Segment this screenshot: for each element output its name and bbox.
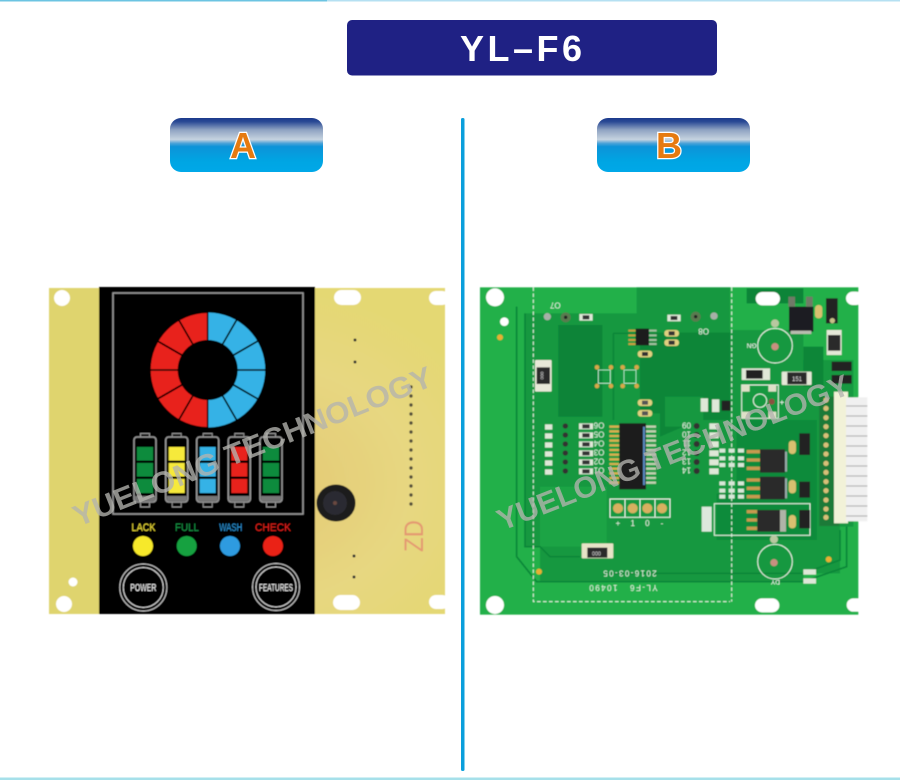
indicator: LACK: LACK	[132, 522, 156, 534]
resistor 151: 151	[792, 377, 803, 383]
resistor R22: 000	[592, 551, 601, 557]
indicator: CHECK	[255, 522, 292, 556]
panel B: green circuit board	[480, 287, 867, 615]
resistor array and pads left: O5	[593, 430, 604, 439]
small parts middle: +	[779, 397, 784, 407]
bottom border line	[0, 778, 900, 780]
trim pad outlines GN and DY: GN	[746, 341, 757, 348]
resistor R23	[535, 360, 552, 392]
display frame	[113, 293, 303, 514]
indicator: LACK	[132, 522, 156, 556]
small parts middle	[701, 368, 784, 497]
contact pads O7 O8	[544, 301, 718, 336]
board date and model silkscreen: YL-F6 10490	[589, 583, 658, 592]
indicator: FULL: FULL	[175, 522, 199, 534]
indicator: FULL	[175, 522, 199, 556]
FEATURES button: FEATURES	[259, 583, 293, 594]
watermark on panel A: YUELONG TECHNOLOGY	[68, 361, 437, 534]
gold circuit board	[49, 288, 449, 614]
indicator: CHECK: CHECK	[255, 522, 292, 534]
small SMD components top	[579, 314, 681, 417]
resistor R22	[582, 543, 613, 558]
diodes and capacitors right	[789, 433, 810, 528]
POWER button	[120, 564, 167, 611]
pads and labels right of IC: 09	[682, 421, 691, 430]
transistors Q	[747, 449, 787, 532]
main IC U1	[609, 423, 656, 489]
four pin header pads: 1	[630, 519, 635, 528]
battery 2 yellow	[166, 434, 188, 507]
resistor R17	[827, 330, 842, 355]
resistor array and pads left	[545, 421, 604, 475]
board date and model silkscreen: 2016-03-05	[603, 569, 657, 578]
FEATURES button	[252, 564, 300, 610]
small diodes near connector	[803, 362, 852, 584]
mounting holes	[486, 288, 863, 614]
indicator: WASH: WASH	[219, 522, 242, 534]
four pin header pads: +	[616, 519, 621, 528]
buzzer	[316, 484, 356, 522]
battery 1 green	[134, 434, 156, 507]
pads and labels right of IC: 11	[682, 439, 691, 448]
ring gauge: red and blue segments	[148, 310, 268, 430]
title banner: YL–F6	[460, 28, 582, 69]
top regulator U3 and capacitors	[788, 297, 838, 334]
label button A: A	[230, 125, 256, 166]
resistor array and pads left: O6	[593, 421, 604, 430]
battery icons row	[134, 434, 282, 507]
battery 3 blue	[197, 434, 219, 507]
resistor array and pads left: O2	[593, 457, 604, 466]
dashed outline	[533, 287, 732, 602]
indicator: WASH	[219, 522, 242, 556]
resistor array and pads left: O1	[593, 466, 604, 475]
battery 4 red	[228, 434, 250, 507]
label button B	[597, 118, 750, 172]
four pin header pads: -	[661, 519, 664, 528]
outlined zone around bottom transistor	[714, 504, 810, 535]
label button A	[170, 118, 323, 172]
label button B: B	[656, 125, 682, 166]
title banner	[347, 20, 717, 76]
push switches S1 S2	[595, 365, 639, 388]
IC U2	[628, 329, 657, 345]
black display panel	[99, 287, 315, 614]
pin header row	[409, 385, 413, 506]
pads and labels right of IC	[682, 421, 719, 475]
vertical divider	[461, 118, 464, 771]
panel A: control panel board	[49, 287, 449, 614]
pads and labels right of IC: 14	[682, 466, 691, 475]
resistor 151	[782, 372, 812, 385]
test pads	[497, 334, 832, 575]
board base	[480, 287, 858, 615]
resistor array and pads left: O4	[593, 439, 604, 448]
pads and labels right of IC: 12	[682, 448, 691, 457]
silkscreen ZD: ZD	[399, 520, 429, 552]
contact pads O7 O8: O7	[549, 301, 561, 310]
pads and labels right of IC: 10	[682, 430, 691, 439]
battery 5 green	[260, 434, 282, 507]
pads and labels right of IC: 13	[682, 457, 691, 466]
top border line	[0, 0, 900, 2]
four pin header pads: 0	[645, 519, 650, 528]
contact pads O7 O8: O8	[698, 327, 709, 336]
four pin header pads	[610, 499, 670, 528]
white connector slab	[702, 507, 712, 532]
watermark on panel B: YUELONG TECHNOLOGY	[492, 369, 854, 538]
board date and model silkscreen	[589, 569, 658, 592]
trim pad outlines GN and DY: DY	[770, 578, 780, 585]
POWER button: POWER	[130, 583, 156, 594]
resistor array and pads left: O3	[593, 448, 604, 457]
resistor R23: 000	[540, 372, 545, 380]
trim pad outlines GN and DY	[746, 319, 792, 585]
connector strip with pins	[819, 392, 867, 526]
